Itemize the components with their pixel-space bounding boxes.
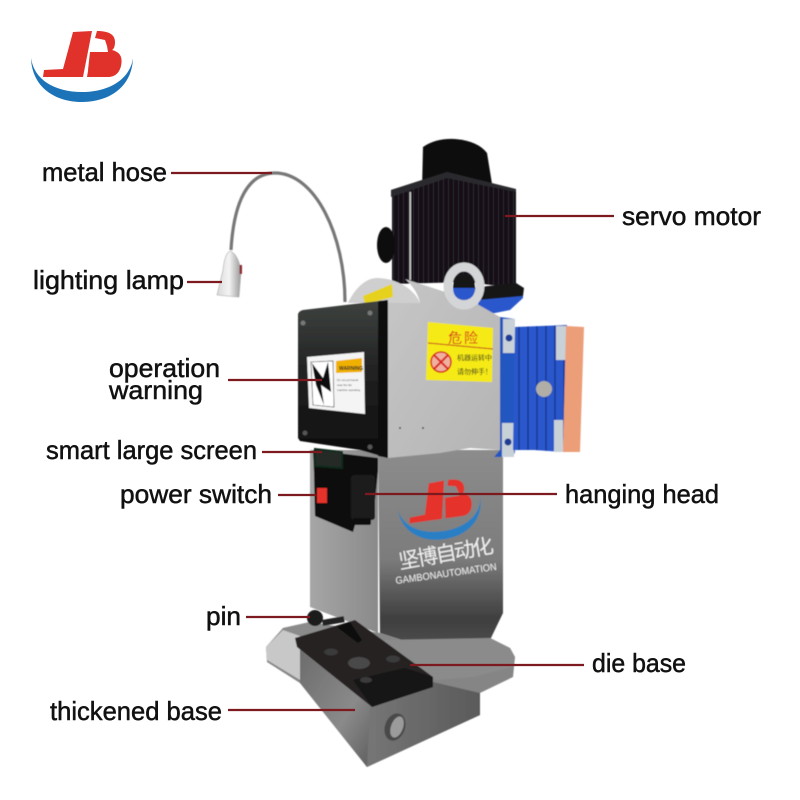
metal hose <box>231 173 345 302</box>
lower body <box>310 450 503 648</box>
thickened base <box>266 622 515 767</box>
orange end cover <box>563 326 584 452</box>
callout: smart large screen: smart large screen <box>46 435 257 465</box>
lighting lamp <box>217 251 242 297</box>
callout: operation warning: warning <box>108 375 203 405</box>
black cover box <box>298 300 388 458</box>
danger label: 请勿伸手！ <box>457 367 492 376</box>
callout: pin <box>206 601 310 631</box>
servo motor <box>377 139 524 314</box>
hanging head <box>351 475 375 525</box>
callout: metal hose: metal hose <box>42 157 167 187</box>
callout: hanging head: hanging head <box>565 479 719 509</box>
callout: lighting lamp: lighting lamp <box>33 265 184 295</box>
body logo and text: 坚博自动化 <box>397 535 495 574</box>
power switch <box>316 485 331 507</box>
danger label: 机器运转中 <box>457 353 492 362</box>
gearbox <box>494 317 584 457</box>
logo: red letters <box>43 31 122 77</box>
callout: operation warning <box>108 353 322 405</box>
callout: die base: die base <box>592 648 686 678</box>
eye bolt <box>448 267 480 305</box>
top housing <box>348 278 500 458</box>
logo <box>31 31 133 102</box>
logo: blue arc <box>31 58 133 102</box>
danger label: 危 险 <box>448 330 478 346</box>
body logo and text: GAMBONAUTOMATION <box>395 562 497 587</box>
operation warning sticker: near the die <box>337 383 352 387</box>
callout: operation warning: operation <box>109 353 220 383</box>
danger label <box>426 322 493 382</box>
operation warning sticker <box>307 352 365 414</box>
pin <box>307 610 345 626</box>
body logo and text <box>395 476 497 587</box>
hose and lamp <box>217 173 345 302</box>
operation warning sticker: machine operating <box>337 388 360 392</box>
machine <box>266 139 584 767</box>
operation warning sticker: WARNING <box>339 366 363 372</box>
smart large screen <box>313 449 378 532</box>
callout: pin: pin <box>206 601 241 631</box>
callout: power switch: power switch <box>120 479 272 509</box>
callout: thickened base: thickened base <box>50 696 222 726</box>
die base <box>295 620 433 707</box>
callout: servo motor: servo motor <box>622 201 761 231</box>
operation warning sticker: Do not put hands <box>337 378 359 382</box>
